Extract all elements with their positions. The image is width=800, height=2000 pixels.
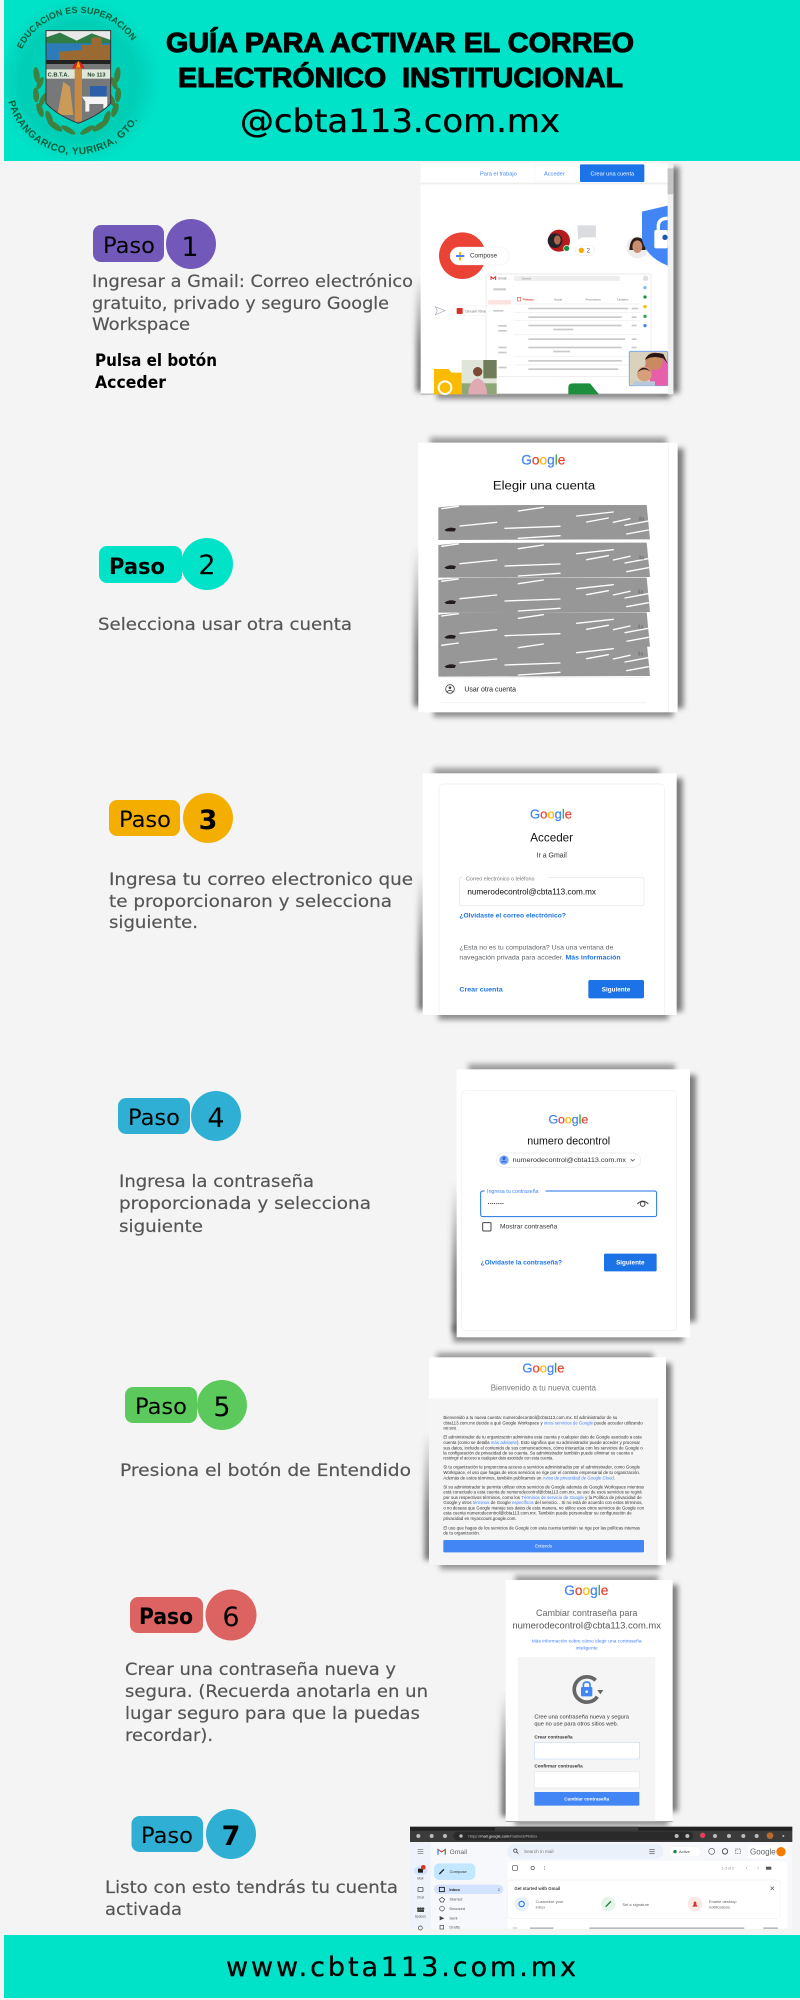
step 7 pill (132, 1816, 203, 1852)
screenshot 5: welcome to your new account: Entiendo (535, 1544, 553, 1549)
screenshot 5: welcome to your new account: sus datos, incluido el contenido de sus comunicaciones, cómo interactúa con los servicios de Google o (443, 1445, 643, 1450)
screenshot 2: choose an account: Google (521, 453, 565, 468)
step 4 (118, 1091, 371, 1237)
screenshot 5: welcome to your new account: Workspace, el uso que hagas de esos servicios se rige por el contrato empresarial de tu organización. (443, 1470, 640, 1475)
step 1 (92, 219, 413, 392)
step 3 (109, 793, 413, 933)
screenshot 5: welcome to your new account: cuenta (como se detalla más adelante). Esto significa que su administrador puede acceder y procesar (443, 1440, 641, 1445)
screenshot 6: change password: Confirmar contraseña (534, 1763, 583, 1768)
screenshot 1: Gmail landing page: Social (554, 297, 562, 301)
screenshot 2: choose an account: ila (638, 651, 643, 657)
screenshot 6: change password: Cree una contraseña nueva y segura (534, 1715, 630, 1721)
step 4 pill: Paso (128, 1106, 180, 1131)
screenshot 7: Gmail inbox: inbox (536, 1905, 545, 1910)
screenshot 6: change password: inteligente (576, 1645, 598, 1651)
screenshot 4: enter password: Siguiente (616, 1260, 645, 1267)
screenshot 3: sign in with email: Ir a Gmail (537, 853, 567, 860)
screenshot 7: Gmail inbox: Snoozed (449, 1906, 465, 1911)
step 5 description: Presiona el botón de Entendido (120, 1461, 411, 1481)
screenshot 3: sign in with email: Google (530, 807, 572, 822)
screenshot 7: Gmail inbox: Chat (417, 1896, 424, 1900)
step 7 description (105, 1878, 398, 1920)
step 2 pill: Paso (109, 555, 165, 580)
step 4 description: siguiente (119, 1217, 203, 1237)
step 1 number (166, 219, 216, 269)
step 6 pill (130, 1597, 203, 1633)
screenshot 5: welcome to your new account: Google y otros términos de Google específicos del servicio. . Si no está de acuerdo con estos términos, (443, 1500, 643, 1505)
step 6 description: Crear una contraseña nueva y (125, 1660, 396, 1680)
step 1 description: Ingresar a Gmail: Correo electrónico (92, 272, 413, 292)
screenshot 1: Gmail landing page: Primary (523, 297, 534, 301)
screenshot 3: sign in with email: ¿Esta no es tu computadora? Usa una ventana de (459, 944, 614, 951)
screenshot 3: sign in with email: ¿Olvidaste el correo electrónico? (459, 912, 566, 919)
website URL: www.cbta113.com.mx (226, 1952, 576, 1983)
screenshot 3: sign in with email: Siguiente (602, 986, 631, 993)
step 3 description: siguiente. (109, 913, 198, 933)
screenshot 5: welcome to your new account: de tu organización. (443, 1530, 480, 1535)
screenshot 5: welcome to your new account: Además de estos términos, también publicamos un Aviso de privacidad de Google Cloud. (443, 1475, 615, 1480)
crest motto text: EDUCACION ES SUPERACION (16, 6, 136, 49)
screenshot 7: Gmail inbox: Mail (417, 1876, 424, 1880)
screenshot 5: welcome to your new account: está conectado a esta cuenta de numerodecontrol@cbta113.com.mx, su uso de esos servicios se regirá (443, 1490, 642, 1495)
step 4 description: proporcionada y selecciona (119, 1194, 371, 1214)
screenshot 6: change password: Más información sobre cómo elegir una contraseña (532, 1638, 642, 1644)
step 6 number: 6 (222, 1602, 240, 1633)
screenshot 7: Gmail inbox: Sent (449, 1916, 458, 1921)
screenshot 5: welcome to your new account: la configuración de privacidad de su cuenta. Su administrador también puede eliminar su cuenta o (443, 1450, 634, 1455)
screenshot 7: Gmail inbox: Compose (450, 1869, 468, 1874)
step 1 description: gratuito, privado y seguro Google (92, 294, 389, 314)
screenshot 1: Gmail landing page: Acceder (544, 172, 565, 178)
screenshot 7: Gmail inbox: Inbox (449, 1887, 461, 1892)
step 5 pill (125, 1387, 197, 1423)
screenshot 7: Gmail inbox: https://mail.google.com/mail/u/3/#inbox (468, 1833, 537, 1838)
step 2 number (181, 538, 233, 590)
screenshot 5: welcome to your new account: Bienvenido a tu nueva cuenta: numerodecontrol@cbta113.com.mx. El administrador de su (443, 1415, 618, 1420)
screenshot 5: welcome to your new account: restringir el acceso a cualquier dato asociado con esta cuenta. (443, 1456, 553, 1461)
screenshot 7: Gmail inbox: 1–2 of 2 (722, 1866, 734, 1870)
screenshot 7: Gmail inbox: Active (679, 1849, 691, 1854)
screenshot 1: Gmail landing page: Compose (470, 253, 498, 260)
crest labels: C.B.T.A. (48, 72, 69, 78)
screenshot 4: enter password: ¿Olvidaste la contraseña? (481, 1259, 562, 1266)
crest labels: No 113 (87, 72, 106, 78)
screenshot 2: choose an account: ila (639, 516, 644, 522)
step 1 description (92, 272, 413, 335)
step 6 (125, 1590, 428, 1746)
step 2 pill (99, 546, 182, 583)
screenshot 1: Gmail landing page (416, 163, 679, 399)
screenshot 1: Gmail landing page: Para el trabajo (480, 172, 517, 178)
crest place text: PARANGARICO, YURIRIA, GTO. (8, 100, 137, 156)
screenshot 7: Gmail inbox: Drafts (449, 1925, 460, 1930)
step 6 description: lugar seguro para que la puedas (125, 1704, 420, 1724)
title: ELECTRÓNICO INSTITUCIONAL (178, 62, 623, 93)
screenshot 5: welcome to your new account (424, 1353, 671, 1569)
step 1 instruction: Acceder (95, 373, 167, 392)
screenshot 1: Gmail landing page: Search (522, 277, 531, 281)
crest shield (46, 31, 111, 123)
screenshot 2: choose an account: Usar otra cuenta (464, 687, 516, 694)
screenshot 6: change password: numerodecontrol@cbta113.com.mx (512, 1621, 662, 1631)
step 2 (98, 538, 352, 635)
screenshot 3: sign in with email: navegación privada para acceder. Más información (459, 954, 621, 961)
screenshot 4: enter password: numero decontrol (527, 1135, 610, 1147)
step 4 description: Ingresa la contraseña (119, 1172, 314, 1192)
screenshot 2: choose an account: ila (638, 625, 643, 631)
screenshot 6: change password: Google (564, 1583, 608, 1598)
step 2 description: Selecciona usar otra cuenta (98, 615, 352, 635)
step 2 number: 2 (198, 550, 216, 581)
screenshot 3: sign in with email (418, 768, 683, 1020)
step 4 number (191, 1091, 241, 1141)
screenshot 5: welcome to your new account: Google (522, 1360, 564, 1375)
screenshot 6: change password: Cambiar contraseña para (536, 1608, 637, 1618)
step 5 number: 5 (213, 1392, 231, 1423)
step 3 pill: Paso (119, 808, 171, 833)
screenshot 5: welcome to your new account: por sus respectivos términos, como los Términos de servicio de Google y la Política de privacidad de (443, 1495, 642, 1500)
step 7 pill: Paso (141, 1824, 193, 1849)
screenshot 3: sign in with email: Acceder (530, 831, 573, 844)
screenshot 4: enter password: Mostrar contraseña (500, 1224, 558, 1231)
screenshot 1: Gmail landing page: Dream Itinerary (465, 308, 493, 313)
screenshot 4: enter password: Ingresa tu contraseña (487, 1189, 539, 1195)
screenshot 3: sign in with email: Correo electrónico o teléfono (466, 876, 534, 882)
step 3 pill (109, 800, 180, 836)
screenshot 7: Gmail inbox: Customize your (536, 1899, 564, 1904)
step 6 description: segura. (Recuerda anotarla en un (125, 1682, 428, 1702)
step 1 pill: Paso (103, 234, 155, 259)
step 1 instruction (95, 351, 217, 392)
screenshot 5: welcome to your new account: El administrador de tu organización administra esta cuenta y cualquier dato de Google asociado a esta (443, 1435, 642, 1440)
screenshot 5: welcome to your new account: Si tu organización te proporciona acceso a servicios administrados por el administrador, como Google (443, 1465, 641, 1470)
step 6 description: recordar). (125, 1726, 213, 1746)
title (166, 27, 634, 93)
screenshot 5: welcome to your new account: privacidad en myaccount.google.com. (443, 1516, 517, 1521)
screenshot 5: welcome to your new account: El uso que hagas de los servicios de Google con esta cuenta también se rige por las políticas internas (443, 1525, 640, 1530)
logo: school crest (5, 6, 152, 156)
step 4 pill (118, 1098, 190, 1134)
screenshot 6: change password: Crear contraseña (534, 1734, 573, 1739)
step 7 number (206, 1809, 256, 1859)
screenshot 1: Gmail landing page: 2 (587, 249, 591, 255)
screenshot 1: Gmail landing page: Updates (617, 297, 629, 301)
crest labels (48, 72, 106, 76)
step 6 number (206, 1590, 256, 1640)
screenshot 2: choose an account: ila (639, 556, 644, 562)
crest wreath (32, 67, 122, 136)
screenshot 5: welcome to your new account: esta cuenta numerodecontrol@cbta113.com.mx. También puede personalizar su configuración de (443, 1511, 632, 1516)
screenshot 4: enter password: Google (548, 1112, 588, 1126)
screenshot 7: Gmail inbox (410, 1827, 792, 1930)
screenshot 1: Gmail landing page: Crear una cuenta (590, 172, 635, 178)
step 7 description: Listo con esto tendrás tu cuenta (105, 1878, 398, 1898)
screenshot 7: Gmail inbox: 2 (498, 1888, 500, 1892)
screenshot 7: Gmail inbox: Search in mail (524, 1849, 554, 1854)
step 1 number: 1 (181, 232, 199, 263)
step 3 number (183, 793, 233, 843)
screenshot 1: Gmail landing page: Promotions (586, 297, 601, 301)
step 1 instruction: Pulsa el botón (95, 351, 217, 370)
screenshot 6: change password (501, 1575, 678, 1826)
screenshot 1: Gmail landing page: Gmail (498, 277, 507, 281)
screenshot 6: change password: que no use para otros sitios web. (534, 1722, 619, 1728)
screenshot 5: welcome to your new account: o no deseas que Google maneje sus datos de esta manera, no utilice esos otros servicios de Google con (443, 1505, 645, 1510)
step 3 number: 3 (199, 805, 217, 836)
step 3 description (109, 870, 413, 933)
screenshot 4: enter password (452, 1064, 696, 1342)
screenshot 2: choose an account: Elegir una cuenta (493, 479, 595, 493)
step 4 description (119, 1172, 371, 1237)
screenshot 5: welcome to your new account: cbta113.com.mx decide a qué Google Workspace y otros servicios de Google puede acceder utilizando (443, 1420, 643, 1425)
step 6 description (125, 1660, 428, 1746)
domain subtitle: @cbta113.com.mx (240, 102, 560, 140)
screenshot 5: welcome to your new account: Bienvenido a tu nueva cuenta (491, 1384, 596, 1393)
screenshot 7: Gmail inbox: Spaces (415, 1915, 426, 1919)
screenshot 2: choose an account (414, 437, 684, 717)
step 1 description: Workspace (92, 315, 190, 335)
screenshot 7: Gmail inbox: Enable desktop (709, 1899, 737, 1904)
screenshot 7: Gmail inbox: Google (750, 1847, 776, 1856)
screenshot 5: welcome to your new account: esta cuenta. (443, 1426, 457, 1431)
screenshot 6: change password: Cambiar contraseña (564, 1797, 609, 1802)
screenshot 2: choose an account: ila (638, 590, 643, 596)
step 7 (105, 1809, 398, 1920)
screenshot 3: sign in with email: Crear cuenta (459, 986, 503, 993)
title: GUÍA PARA ACTIVAR EL CORREO (166, 27, 634, 58)
screenshot 7: Gmail inbox: Set a signature (622, 1902, 650, 1907)
screenshot 7: Gmail inbox: notifications (709, 1905, 730, 1910)
step 1 pill (93, 225, 164, 262)
screenshot 4: enter password: ········ (488, 1201, 504, 1208)
step 7 description: activada (105, 1900, 182, 1920)
step 4 number: 4 (207, 1103, 225, 1134)
step 6 pill: Paso (139, 1605, 193, 1630)
footer band (4, 1935, 800, 1998)
screenshot 3: sign in with email: numerodecontrol@cbta113.com.mx (467, 887, 596, 896)
header band (4, 0, 800, 161)
screenshot 4: enter password: numerodecontrol@cbta113.com.mx (513, 1157, 627, 1164)
step 5 pill: Paso (135, 1395, 187, 1420)
step 5 number (197, 1380, 247, 1430)
screenshot 7: Gmail inbox: Starred (449, 1896, 462, 1901)
step 7 number: 7 (222, 1821, 240, 1852)
screenshot 5: welcome to your new account: Si su administrador te permite utilizar otros servicios de Google además de Google Workspace mientras (443, 1485, 644, 1490)
screenshot 7: Gmail inbox: Get started with Gmail (514, 1886, 560, 1891)
screenshot 7: Gmail inbox: Gmail (450, 1849, 468, 1856)
step 3 description: Ingresa tu correo electronico que (109, 870, 413, 890)
step 3 description: te proporcionaron y selecciona (109, 892, 392, 912)
step 5 (120, 1380, 411, 1481)
